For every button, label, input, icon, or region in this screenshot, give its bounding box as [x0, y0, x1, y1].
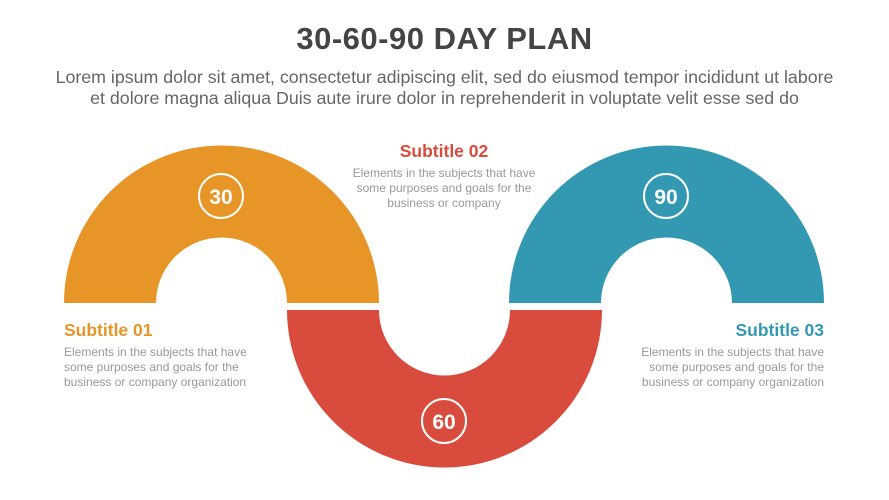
text block: subtitle 03: [641, 320, 824, 389]
text block: subtitle 03: Subtitle 03: [736, 320, 824, 340]
text block: subtitle 01: Elements in the subjects that have: [64, 345, 247, 359]
text block: subtitle 01: [64, 320, 247, 389]
text block: subtitle 01: some purposes and goals for the: [64, 360, 239, 374]
arch: 90: [509, 146, 824, 303]
arch: 60: [287, 310, 602, 468]
arch: 30: 30: [209, 186, 233, 209]
text block: subtitle 01: business or company organization: [64, 375, 246, 389]
text block: subtitle 02: Elements in the subjects that have: [353, 166, 535, 180]
intro text: et dolore magna aliqua Duis aute irure dolor in reprehenderit in voluptate velit esse sed do: [90, 88, 799, 108]
arch: 60: 60: [432, 411, 456, 434]
text block: subtitle 03: Elements in the subjects that have: [641, 345, 824, 359]
text block: subtitle 03: some purposes and goals for the: [649, 360, 824, 374]
text block: subtitle 02: business or company: [387, 196, 501, 210]
text block: subtitle 02: some purposes and goals for the: [357, 181, 531, 195]
text block: subtitle 02: [353, 141, 535, 210]
arch: 90: 90: [654, 186, 678, 209]
intro text: Lorem ipsum dolor sit amet, consectetur adipiscing elit, sed do eiusmod tempor incididunt ut labore: [56, 67, 833, 87]
arch: 30: [64, 146, 379, 303]
title: 30-60-90 DAY PLAN: [296, 21, 593, 56]
text block: subtitle 02: Subtitle 02: [400, 141, 488, 161]
intro text: [56, 67, 833, 108]
text block: subtitle 01: Subtitle 01: [64, 320, 152, 340]
text block: subtitle 03: business or company organization: [642, 375, 824, 389]
